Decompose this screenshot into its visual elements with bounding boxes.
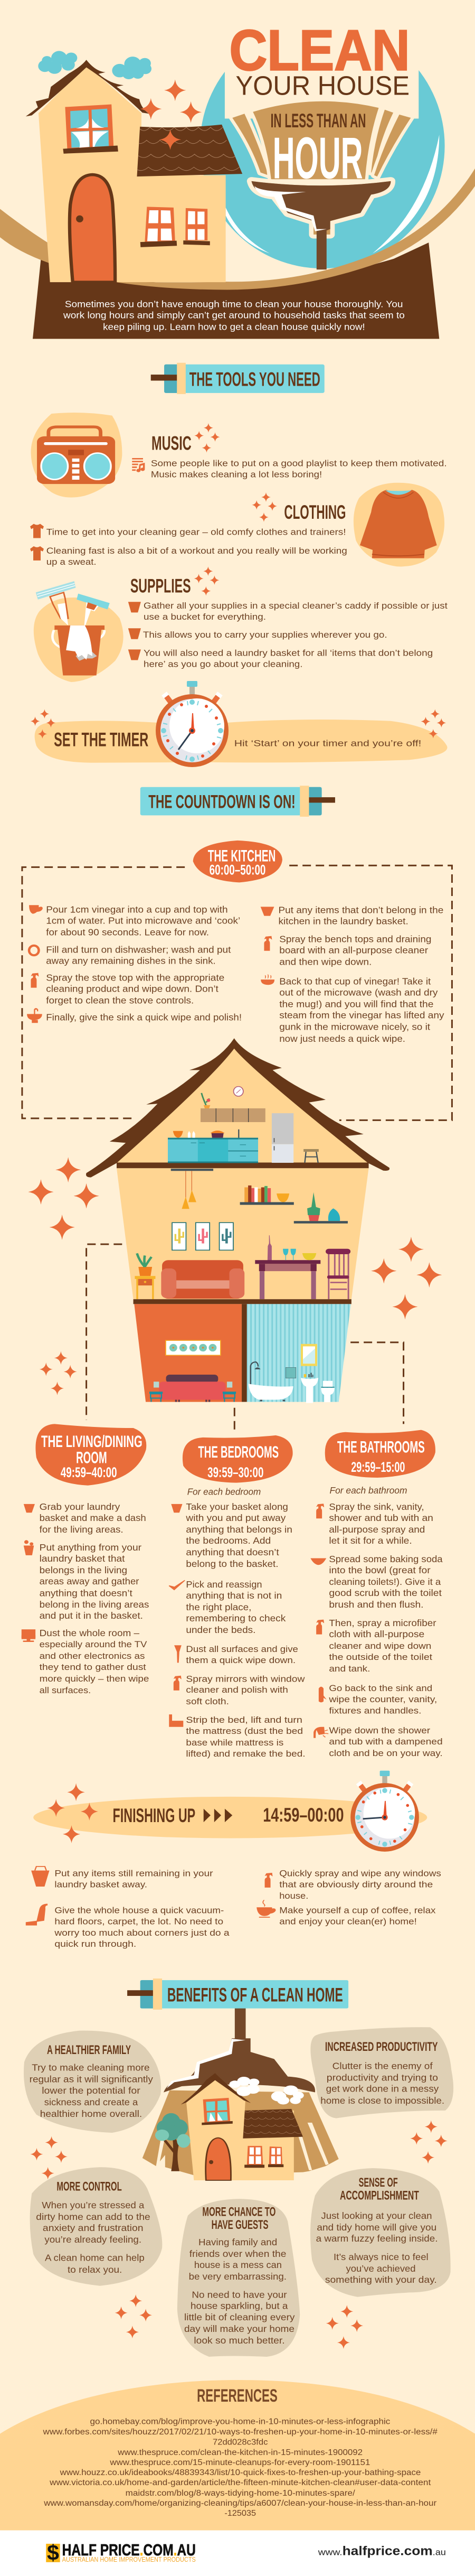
intro banner: [33, 242, 439, 339]
section: references and footer: [0, 2294, 475, 2576]
clothing blob and sweater: [354, 483, 444, 566]
title: HOUR: [273, 126, 363, 191]
bathroom text: all-purpose spray and: [329, 1524, 425, 1535]
kitchen heading: THE KITCHEN: [208, 847, 276, 865]
sparkles music: [194, 423, 220, 453]
kitchen text right: the mug!) and you will find that the: [279, 999, 433, 1009]
house: roof: [86, 1038, 390, 1178]
website address: www.: [318, 2547, 343, 2557]
kitchen text left: 1cm of water. Put into microwave and ‘cook’: [46, 915, 240, 926]
section: tools: CLOTHING: [284, 501, 346, 524]
intro text: work long hours and simply can’t get around to household tasks that seem to: [63, 310, 405, 320]
living room furniture: [135, 1192, 350, 1299]
finishing text right: and enjoy your clean(er) home!: [279, 1917, 417, 1927]
room connector lines: [87, 1244, 404, 1433]
panel: a healthier family: sickness and create a: [44, 2097, 138, 2107]
finishing text left: [54, 1869, 230, 1949]
heading: benefits of a clean home: [127, 1978, 348, 2010]
panel: more control: When you’re stressed a: [42, 2200, 145, 2210]
panel: more chance to have guests: day will make your home: [184, 2323, 294, 2334]
heading: bedrooms: [183, 1435, 293, 1483]
bedroom text: Pick and reassign: [186, 1579, 262, 1590]
bedroom text continued: [186, 1644, 306, 1759]
house: wall: [117, 1168, 369, 1299]
broom handle: [235, 2008, 246, 2040]
bedroom: [134, 1299, 352, 1402]
living text: Dust the whole room –: [40, 1628, 140, 1638]
panel: references: maidstr.com/blog/8-ways-tidying-home-10-minutes-spare/: [126, 2489, 355, 2498]
kitchen text left: away any remaining dishes in the sink.: [46, 956, 216, 966]
bedroom text: with you and put away: [185, 1513, 286, 1523]
panel: a healthier family: regular as it will significantly: [30, 2074, 153, 2085]
footer band: [0, 2531, 475, 2576]
bedroom icons: [169, 1504, 185, 1590]
kitchen text left: Fill and turn on dishwasher; wash and put: [46, 945, 231, 955]
panel: sense of accomplishment: [310, 2168, 451, 2297]
kitchen text right: Spray the bench tops and draining: [279, 934, 431, 944]
section: tips continued and finishing up: [22, 1636, 443, 1949]
panel: more control: dirty home can add to the: [36, 2211, 150, 2222]
heading: the countdown is on: [140, 786, 335, 817]
section: tools: [30, 413, 448, 763]
bathroom text continued: Wipe down the shower: [329, 1725, 431, 1735]
bedroom text: remembering to check: [186, 1613, 286, 1623]
section: rooms and tips: [22, 1192, 443, 1639]
bedroom text continued: Strip the bed, lift and turn: [186, 1715, 302, 1725]
bathroom text continued: [328, 1641, 443, 1758]
finishing text right: house.: [279, 1891, 308, 1901]
sparkles timer: [31, 709, 446, 739]
finishing text right: Make yourself a cup of coffee, relax: [279, 1906, 436, 1916]
panel: set the timer: [35, 720, 447, 763]
bedroom text continued: Spray mirrors with window: [186, 1674, 305, 1684]
website address: halfprice.com: [343, 2543, 433, 2558]
bathroom text: good scrub with the toilet: [329, 1588, 442, 1598]
bedroom text continued: the mattress (dust the bed: [186, 1726, 303, 1736]
bathroom text: into the bowl (great for: [329, 1565, 431, 1575]
heading: bedrooms: THE BEDROOMS: [198, 1443, 279, 1462]
finishing text left: hard floors, carpet, the lot. No need to: [54, 1917, 223, 1927]
bathroom text: shower and tub with an: [329, 1513, 433, 1523]
panel: set the timer: SET THE TIMER: [54, 729, 148, 751]
kitchen icons right: [261, 907, 274, 985]
supplies bullets: This allows you to carry your supplies wherever you go.: [143, 630, 387, 640]
bedroom text: the bedrooms. Add: [186, 1535, 271, 1546]
kitchen text left: Pour 1cm vinegar into a cup and top with: [46, 904, 228, 914]
kitchen room furniture: [117, 1087, 369, 1209]
heading: bedrooms: 39:59–30:00: [207, 1464, 263, 1480]
intro text: Sometimes you don’t have enough time to clean your house thoroughly. You: [65, 299, 403, 309]
kitchen text right: Put any items that don’t belong in the: [279, 905, 443, 915]
finishing icons right: [256, 1873, 276, 1918]
heading: living dining room: ROOM: [76, 1449, 107, 1467]
panel: sense of accomplishment: It’s always nice to feel: [334, 2252, 429, 2262]
finishing icons left: [26, 1866, 50, 1926]
bedroom text continued: base while mattress is: [186, 1738, 283, 1748]
living text: Grab your laundry: [40, 1501, 120, 1512]
living text continued: [40, 1639, 149, 1695]
living text continued: more quickly – then wipe: [40, 1674, 149, 1684]
bedroom text continued: soft cloth.: [186, 1696, 229, 1706]
bathroom text: Spread some baking soda: [329, 1554, 443, 1564]
title: IN LESS THAN AN: [271, 110, 366, 132]
bathroom text continued: cloth and be on your way.: [329, 1748, 443, 1758]
sparkles clothing: [252, 492, 277, 522]
icon: finishing stopwatch: [350, 1771, 419, 1852]
panel: more control: to relax you.: [68, 2264, 122, 2275]
bathroom icons continued: [314, 1687, 328, 1738]
heading: bathrooms: [325, 1430, 435, 1478]
broom highlight: [167, 2039, 245, 2088]
bathroom text continued: fixtures and handles.: [329, 1706, 421, 1716]
section: tools: SUPPLIES: [130, 575, 191, 597]
intro text: keep piling up. Learn how to get a clean house quickly now!: [103, 322, 365, 332]
text: for each bedroom: For each bedroom: [187, 1487, 261, 1497]
bathroom: [247, 1304, 351, 1403]
bathroom text: Spray the sink, vanity,: [329, 1501, 424, 1512]
bedroom text continued: them a quick wipe down.: [186, 1655, 296, 1666]
supplies blob and bucket: [34, 581, 124, 682]
panel: references: [0, 2380, 475, 2531]
panel: more chance to have guests: house is a mess can: [194, 2260, 282, 2270]
kitchen text left: cleaning product and wipe down. Don’t: [46, 984, 218, 994]
living text: for the living areas.: [40, 1524, 124, 1535]
title: [230, 19, 410, 191]
bathroom text continued: the outside of the toilet: [329, 1652, 433, 1662]
title: YOUR HOUSE: [236, 71, 410, 101]
panel: more chance to have guests: little bit of cleaning every: [184, 2312, 295, 2322]
bedroom text continued: Dust all surfaces and give: [186, 1644, 298, 1654]
kitchen text right: kitchen in the laundry basket.: [279, 916, 408, 926]
title: CLEAN: [230, 19, 410, 82]
bedroom text continued: lifted) and remake the bed.: [186, 1749, 306, 1759]
sparkles around house: [140, 80, 202, 150]
sparkles supplies: [194, 566, 219, 596]
bathroom text: [329, 1501, 443, 1639]
panel: sense of accomplishment: SENSE OF: [359, 2175, 398, 2189]
kitchen text left: [46, 904, 242, 1022]
small house: [181, 2073, 303, 2180]
panel: a healthier family: Try to make cleaning more: [32, 2062, 150, 2073]
house: attic interior: [117, 1049, 368, 1163]
section: benefits: [24, 1978, 453, 2357]
kitchen text left: Spray the stove top with the appropriate: [46, 973, 224, 983]
panel: more chance to have guests: house sparkling, but a: [191, 2301, 288, 2311]
kitchen text left: for about 90 seconds. Leave for now.: [46, 927, 209, 937]
panel: a healthier family: lower the potential for: [42, 2085, 140, 2096]
living text continued: especially around the TV: [40, 1639, 147, 1649]
music text: [151, 459, 447, 480]
kitchen text right: and then wipe down.: [279, 957, 372, 967]
bedroom text: under the beds.: [186, 1625, 255, 1635]
panel: more chance to have guests: No need to have your: [192, 2290, 287, 2300]
panel: more control: [30, 2167, 162, 2286]
living text: and put it in the basket.: [40, 1610, 143, 1621]
logo: half price: [46, 2541, 196, 2565]
panel: finishing up: 14:59–00:00: [263, 1804, 344, 1826]
heading: living dining room: THE LIVING/DINING: [41, 1433, 142, 1451]
finishing text left: Give the whole house a quick vacuum-: [54, 1906, 224, 1916]
bathroom text: let it sit for a while.: [329, 1535, 412, 1546]
living text: Put anything from your: [40, 1542, 141, 1553]
bathroom text: Then, spray a microfiber: [329, 1618, 436, 1628]
bedroom text: belong to the basket.: [186, 1558, 279, 1569]
logo: half price: HALF PRICE.COM.AU: [62, 2541, 196, 2559]
clothing bullets: Cleaning fast is also a bit of a workout and you really will be working: [46, 546, 347, 556]
kitchen text right: out of the microwave (wash and dry: [279, 987, 438, 997]
kitchen text right: steam from the vinegar has lifted any: [279, 1010, 444, 1020]
panel: finishing up: FINISHING UP: [113, 1805, 195, 1827]
title backing: [225, 0, 419, 118]
section: kitchen and roof: [22, 786, 452, 1299]
panel: more control: MORE CONTROL: [56, 2179, 122, 2194]
panel: sense of accomplishment: and tidy home will give you: [317, 2222, 436, 2233]
broom bristles: [142, 2090, 339, 2175]
bedroom text: anything that doesn’t: [186, 1547, 279, 1557]
panel: a healthier family: A HEALTHIER FAMILY: [47, 2042, 131, 2057]
bathroom text continued: and tub with a dampened: [329, 1737, 443, 1747]
kitchen heading: 60:00–50:00: [210, 862, 265, 878]
finishing text right: Quickly spray and wipe any windows: [279, 1869, 441, 1879]
finishing text left: laundry basket away.: [54, 1880, 147, 1890]
panel: more chance to have guests: MORE CHANCE TO: [202, 2204, 276, 2219]
kitchen text left: forget to clean the stove controls.: [46, 995, 194, 1005]
kitchen text right: Back to that cup of vinegar! Take it: [279, 976, 431, 986]
panel: finishing up: [33, 1797, 427, 1838]
music blob and boombox: [31, 413, 122, 498]
living text: belongs in the living: [40, 1565, 127, 1575]
living text continued: all surfaces.: [40, 1685, 91, 1695]
section: tools: MUSIC: [151, 432, 192, 454]
kitchen text right: [279, 905, 444, 1044]
kitchen text right: now just needs a quick wipe.: [279, 1033, 405, 1044]
section: header: [0, 0, 475, 394]
panel: more control: A clean home can help: [45, 2253, 145, 2263]
living icons: [22, 1504, 35, 1638]
website address: [318, 2543, 446, 2558]
panel: increased productivity: Clutter is the enemy of: [332, 2061, 433, 2071]
bathroom text: brush and then flush.: [329, 1599, 423, 1610]
kitchen icons left: [27, 905, 43, 1023]
broom head: [164, 2038, 315, 2092]
tree: [155, 2113, 190, 2171]
panel: more chance to have guests: be very embarrassing.: [189, 2272, 287, 2282]
clothing bullets: Time to get into your cleaning gear – old comfy clothes and trainers!: [46, 527, 346, 537]
icon: timer stopwatch: [156, 681, 229, 767]
panel: references: 72dd028c3fdc: [213, 2438, 268, 2447]
sparkles around rooms: [40, 1215, 442, 1395]
bedroom text: the right place,: [186, 1602, 251, 1612]
house: [26, 60, 242, 282]
finishing text right: that are obviously dirty around the: [279, 1880, 433, 1890]
bedroom text: [185, 1501, 292, 1635]
music text: Music makes cleaning a lot less boring!: [151, 470, 322, 480]
heading: living dining room: [35, 1424, 146, 1486]
sparkles finishing: [48, 1783, 98, 1843]
panel: more control: you’re already feeling.: [44, 2234, 141, 2245]
bathroom text: cleaning toilets!). Give it a: [329, 1576, 441, 1587]
text: for each bathroom: For each bathroom: [330, 1485, 407, 1496]
panel: more chance to have guests: HAVE GUESTS: [212, 2217, 269, 2232]
supplies bullets: here’ as you go about your cleaning.: [144, 659, 302, 669]
panel: increased productivity: [310, 2027, 453, 2118]
kitchen text right: board with an all-purpose cleaner: [279, 945, 428, 955]
website address: .au: [433, 2547, 446, 2557]
bathroom text continued: cleaner and wipe down: [329, 1641, 431, 1651]
intro text: [63, 299, 405, 332]
supplies bullets: use a bucket for everything.: [144, 612, 266, 622]
clouds: [38, 51, 151, 79]
panel: more chance to have guests: Having family and: [198, 2237, 277, 2247]
broom: [232, 101, 411, 269]
living text continued: and other electronics as: [40, 1651, 145, 1662]
clothing bullets: up a sweat.: [46, 557, 97, 567]
bedroom text: anything that is not in: [186, 1590, 282, 1601]
living text: anything that doesn’t: [40, 1588, 132, 1598]
heading: the countdown is on: THE COUNTDOWN IS ON!: [148, 791, 296, 812]
panel: more chance to have guests: [177, 2199, 300, 2357]
bathroom text continued: and tank.: [329, 1664, 370, 1674]
heading: bathrooms: 29:59–15:00: [351, 1459, 405, 1475]
bathroom text: cloth with all-purpose: [329, 1629, 424, 1639]
living text: areas away and gather: [40, 1576, 139, 1586]
white highlights on circle: [226, 135, 439, 254]
panel: sense of accomplishment: you’ve achieved: [346, 2263, 416, 2274]
teal circle behind broom: [200, 23, 445, 268]
living text continued: they tend to gather dust: [40, 1662, 146, 1672]
living text: basket and make a dash: [40, 1513, 146, 1523]
panel: more chance to have guests: look so much better.: [194, 2335, 285, 2346]
bedroom icons continued: [169, 1645, 183, 1727]
finishing text right: [279, 1869, 441, 1927]
kitchen text right: gunk in the microwave nicely, so it: [279, 1022, 430, 1032]
panel: set the timer: Hit ‘Start’ on your timer and you’re off!: [234, 739, 421, 749]
bedroom text continued: cleaner and polish with: [186, 1685, 288, 1695]
heading: the tools you need: THE TOOLS YOU NEED: [189, 369, 320, 390]
finishing text left: Put any items still remaining in your: [54, 1869, 213, 1879]
heading: living dining room: 49:59–40:00: [61, 1464, 117, 1480]
logo: half price: AUSTRALIAN HOME IMPROVEMENT PRODUCTS: [62, 2556, 196, 2563]
bathroom text continued: wipe the counter, vanity,: [328, 1694, 437, 1704]
finishing text left: quick run through.: [54, 1939, 136, 1949]
icon: monitor stand: [22, 1636, 35, 1642]
supplies bullets: You will also need a laundry basket for all ‘items that don’t belong: [144, 648, 433, 658]
panel: references: -125035: [224, 2509, 256, 2518]
panel: sense of accomplishment: Just looking at your clean: [321, 2210, 432, 2221]
panel: references: www.thespruce.com/15-minute-cleanups-for-every-room-1901151: [110, 2458, 370, 2467]
panel: references: www.thespruce.com/clean-the-kitchen-in-15-minutes-1900092: [117, 2448, 363, 2457]
bathroom text continued: Go back to the sink and: [329, 1683, 432, 1693]
panel: sense of accomplishment: something with your day.: [325, 2274, 437, 2285]
supplies bullets: [128, 601, 448, 669]
logo: half price: $: [47, 2541, 59, 2565]
bathroom icons: [310, 1504, 326, 1635]
kitchen dashed frame: [22, 865, 452, 1120]
finishing text left: worry too much about corners just do a: [54, 1928, 230, 1938]
living text: laundry basket that: [40, 1553, 125, 1564]
tan swoosh: [0, 169, 475, 290]
living text: [40, 1501, 149, 1638]
panel: references: REFERENCES: [197, 2386, 278, 2406]
clothing bullets: [30, 524, 347, 567]
sparkles left of house: [28, 1157, 99, 1209]
kitchen heading: [193, 841, 282, 882]
panel: more control: anxiety and frustration: [43, 2223, 144, 2233]
bedroom text: Take your basket along: [186, 1501, 288, 1512]
icon: music note: [132, 458, 145, 472]
panel: a healthier family: healthier home overall.: [40, 2108, 142, 2119]
sparkles lower: [115, 2294, 363, 2349]
kitchen text left: Finally, give the sink a quick wipe and polish!: [46, 1012, 242, 1022]
heading: the tools you need: [151, 363, 325, 394]
sparkles benefits: [30, 2121, 448, 2179]
white clouds: [230, 2077, 304, 2104]
living text: belong in the living areas: [40, 1599, 149, 1610]
panel: increased productivity: productivity and trying to: [327, 2073, 438, 2083]
panel: more chance to have guests: friends over when the: [189, 2248, 286, 2259]
panel: a healthier family: [24, 2031, 161, 2133]
bedroom text: anything that belongs in: [186, 1524, 292, 1535]
